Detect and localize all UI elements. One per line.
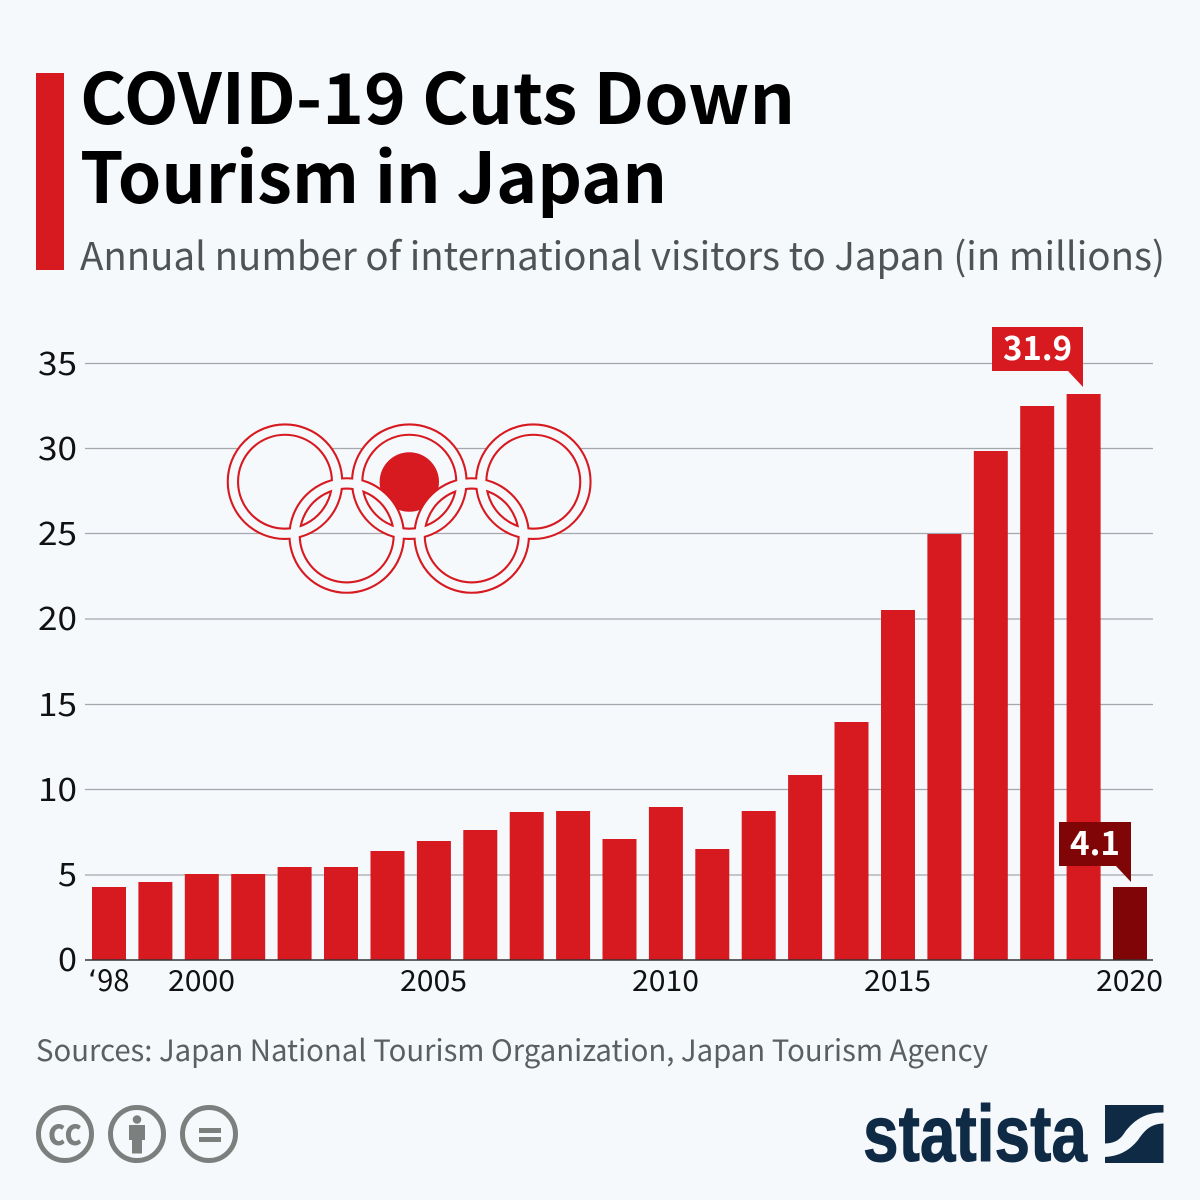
statista wordmark: statista: [863, 1089, 1087, 1178]
callout: 2020 value: [1059, 817, 1131, 882]
y axis labels: 35: [38, 339, 77, 385]
icon: no derivatives equals: [182, 1108, 236, 1160]
bars: [92, 394, 1101, 960]
icon: creative commons: cc: [48, 1102, 82, 1156]
x axis labels: 2005: [400, 958, 467, 1000]
y axis labels: 20: [38, 594, 77, 640]
y axis labels: 0: [58, 935, 77, 981]
x axis labels: 2000: [168, 958, 235, 1000]
y axis labels: [38, 339, 77, 981]
x axis labels: 2020: [1096, 958, 1163, 1000]
statista logo icon: [1105, 1105, 1164, 1163]
x axis labels: [88, 958, 1163, 1000]
y axis labels: 10: [38, 765, 77, 811]
title: [80, 44, 795, 224]
title: COVID-19 Cuts Down: [80, 44, 795, 145]
source note: Sources: Japan National Tourism Organization, Japan Tourism Agency: [36, 1028, 988, 1070]
y axis labels: 5: [58, 850, 77, 896]
chart: [38, 322, 1163, 1000]
callout: 2019 value: 31.9: [1003, 322, 1072, 370]
x axis labels: 2015: [864, 958, 931, 1000]
subtitle: Annual number of international visitors to Japan (in millions): [80, 226, 1165, 282]
title: Tourism in Japan: [80, 123, 667, 224]
y axis labels: 15: [38, 680, 77, 726]
icon: attribution person: [110, 1108, 164, 1160]
callout: 2020 value: 4.1: [1070, 817, 1120, 865]
x axis labels: ‘98: [88, 958, 129, 1000]
icon: Olympic rings with Japanese rising sun: [233, 430, 585, 588]
y axis labels: 30: [38, 424, 77, 470]
bar: 2020 highlighted: [1113, 887, 1147, 960]
x axis labels: 2010: [632, 958, 699, 1000]
icon: creative commons: [38, 1102, 92, 1160]
callout: 2019 value: [992, 322, 1083, 387]
title accent bar: [36, 73, 64, 270]
y axis labels: 25: [38, 509, 77, 555]
